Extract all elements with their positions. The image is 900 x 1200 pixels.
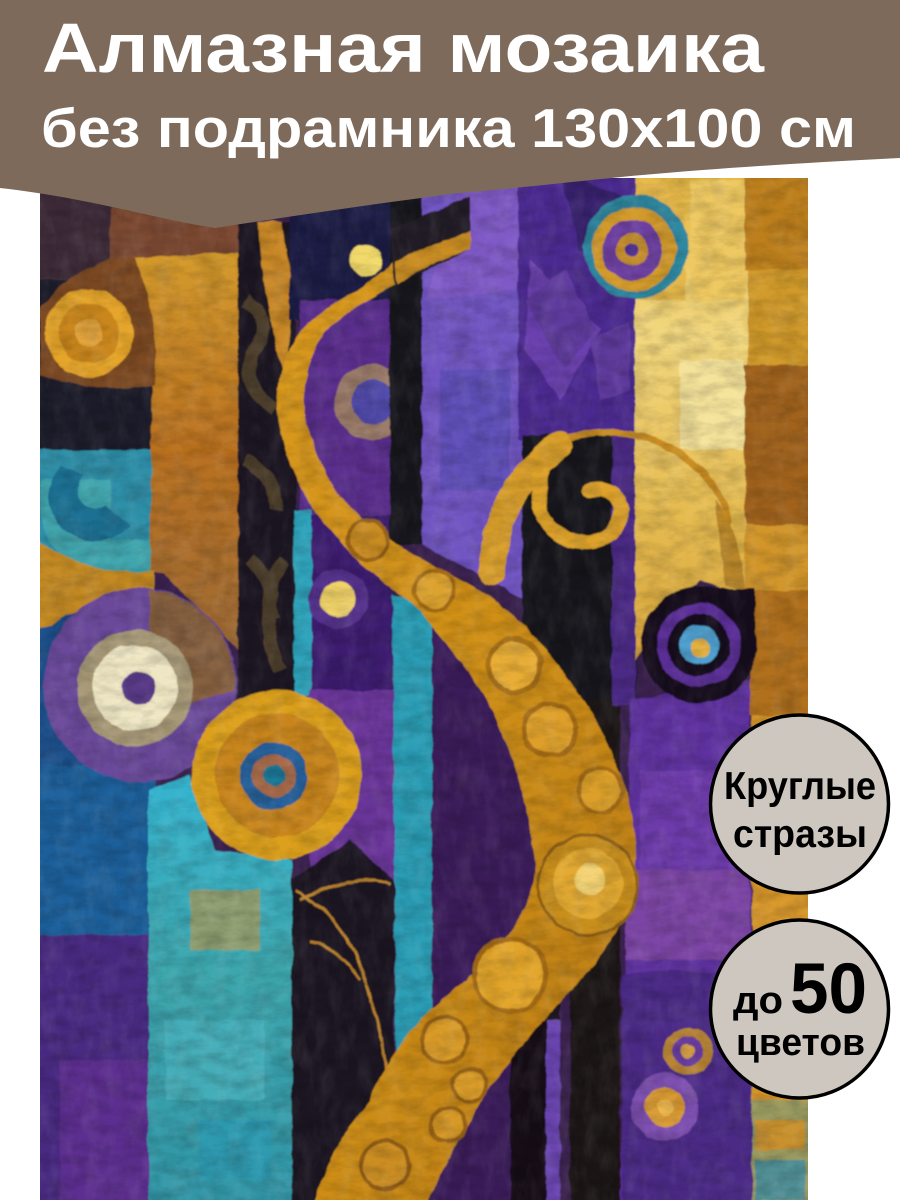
badge: round rhinestones: [710, 715, 888, 893]
large gold circle with blue centre: [192, 690, 362, 860]
dark navy block with yellow circle: [290, 190, 395, 320]
title banner: [0, 0, 900, 228]
gold arrow stroke: [40, 540, 156, 630]
paint texture overlay: [40, 178, 808, 1200]
teal tall strip: [392, 595, 432, 1075]
black strip: [390, 190, 424, 545]
right brown gold blocks: [742, 178, 808, 1200]
badge: up to 50 colours: до: [733, 980, 783, 1022]
black lower panel with gold lines: [290, 840, 394, 1200]
badge: up to 50 colours: цветов: [736, 1022, 865, 1064]
teal lower panel: [148, 775, 292, 1200]
title line 2: без подрамника 130х100 см: [41, 97, 856, 159]
gold band: [130, 252, 240, 650]
title line 1: Алмазная мозаика: [42, 9, 765, 87]
badge: up to 50 colours: [710, 920, 888, 1098]
yellow gold panel: [635, 160, 750, 660]
purple panel with faded circle: [298, 298, 392, 517]
patterned purple column: [518, 160, 638, 440]
gold spiral circle top left: [40, 258, 156, 388]
yellow panel patches: [640, 180, 745, 590]
dark purple panel with yellow circle: [308, 515, 394, 695]
small gold rosettes lower right: [631, 1027, 712, 1141]
left column colour blocks: [40, 194, 240, 1200]
purple lower panel: [310, 690, 395, 890]
painting: abstract gold and purple artwork: [20, 150, 830, 1200]
violet column: [422, 170, 525, 600]
teal gold spiral circle top right: [584, 195, 688, 299]
painting background: [153, 216, 754, 1200]
banner shape: [0, 0, 900, 228]
ribbon large rosette: [538, 835, 638, 935]
badge: up to 50 colours: 50: [790, 950, 867, 1029]
gold hook spiral: [492, 432, 728, 572]
large purple circle left: [43, 588, 237, 782]
S-curve gold ribbon: [277, 196, 636, 1200]
dark purple lower column: [432, 630, 536, 1200]
black ring with blue centre: [641, 587, 757, 703]
badge: round rhinestones: Круглые: [724, 765, 876, 808]
teal strip: [294, 510, 313, 695]
black lower right column: [510, 435, 637, 1200]
badge: round rhinestones: стразы: [733, 813, 867, 856]
purple right panel: [620, 680, 752, 1200]
black textured column: [238, 222, 296, 697]
